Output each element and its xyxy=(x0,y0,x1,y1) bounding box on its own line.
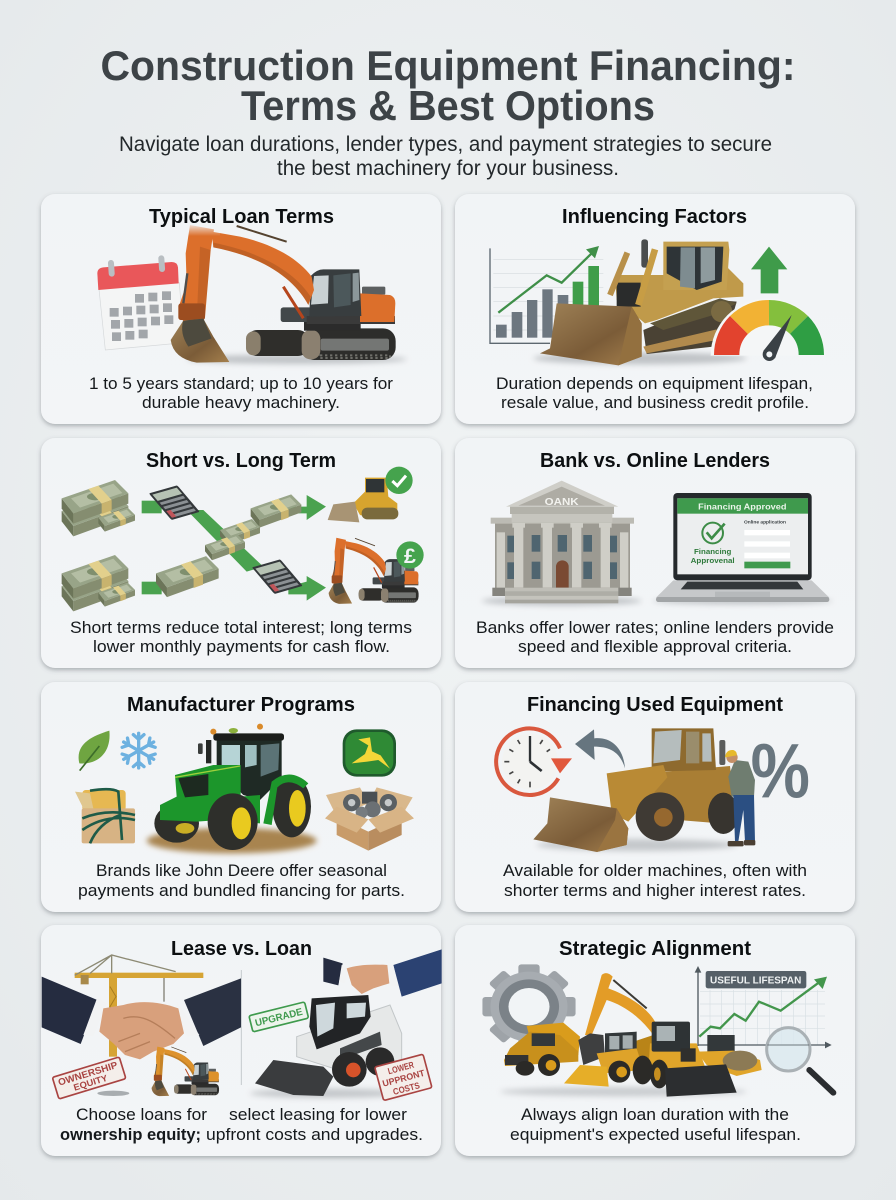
icon: skid steer xyxy=(250,995,403,1098)
text block xyxy=(510,1105,801,1144)
icon: upgrade stamp xyxy=(249,1002,309,1032)
text block: Available for older machines, often with xyxy=(503,861,807,880)
icon: small bulldozer xyxy=(328,478,398,522)
heading: Lease vs. Loan xyxy=(171,938,312,960)
text block xyxy=(89,374,393,412)
heading: Short vs. Long Term xyxy=(146,450,336,472)
icon: ownership equity stamp: OWNERSHIP xyxy=(57,1060,120,1089)
heading: Influencing Factors xyxy=(562,206,747,228)
text block: payments and bundled financing for parts. xyxy=(78,881,405,900)
green flow arrows xyxy=(142,495,326,601)
subtitle xyxy=(119,133,772,180)
icon: center loader xyxy=(564,1032,643,1087)
icon: bundled package xyxy=(75,789,135,843)
line chart: useful lifespan: USEFUL LIFESPAN xyxy=(710,975,801,986)
icon: calculator bottom xyxy=(252,559,303,594)
icon: upgrade stamp: UPGRADE xyxy=(254,1007,304,1029)
subtitle: the best machinery for your business. xyxy=(277,157,619,180)
icon: box of parts xyxy=(325,787,414,851)
icon: leaf xyxy=(79,731,110,771)
text block: resale value, and business credit profile. xyxy=(501,393,809,412)
icon: roller xyxy=(697,1035,762,1076)
icon: lower upfront costs stamp xyxy=(375,1054,432,1101)
panel: bank vs online lenders xyxy=(455,438,855,668)
icon: laptop with approval screen: Financing xyxy=(694,547,731,556)
icon: money stack top xyxy=(62,480,135,536)
text block: Choose loans for xyxy=(76,1105,207,1124)
icon: mini excavator xyxy=(152,1047,219,1096)
icon: deer logo xyxy=(343,729,396,777)
icon: laptop with approval screen: Financing Approved xyxy=(698,502,786,512)
text block: lower monthly payments for cash flow. xyxy=(93,637,390,656)
icon: back arrow xyxy=(575,729,625,768)
icon: worker xyxy=(725,750,755,846)
panel: strategic alignment xyxy=(455,925,855,1156)
icon: small excavator xyxy=(329,538,419,604)
icon: lower upfront costs stamp: COSTS xyxy=(392,1080,421,1097)
text block: Brands like John Deere offer seasonal xyxy=(96,861,387,880)
panel: financing used equipment xyxy=(455,682,855,912)
illustration: money flows to equipment xyxy=(62,467,424,611)
text block: upfront costs and upgrades. xyxy=(206,1125,423,1144)
icon: used wheel loader xyxy=(533,728,739,852)
icon: snowflake xyxy=(121,733,156,768)
illustration: handshakes, crane, skid steer xyxy=(42,949,442,1101)
title: Terms & Best Options xyxy=(241,82,655,129)
icon: laptop with approval screen xyxy=(653,493,833,604)
text block: 1 to 5 years standard; up to 10 years for xyxy=(89,374,393,393)
icon: orange excavator xyxy=(171,225,396,363)
icon: laptop with approval screen: Approvenal xyxy=(691,556,735,565)
panel: manufacturer programs xyxy=(41,682,441,912)
panel: short vs long term xyxy=(41,438,441,668)
text block: equipment's expected useful lifespan. xyxy=(510,1125,801,1144)
text block: ownership equity; xyxy=(60,1125,201,1144)
text block xyxy=(78,861,405,900)
illustration: clock, loader, worker, percent xyxy=(496,728,810,852)
panel: typical loan terms xyxy=(41,194,441,424)
text block xyxy=(60,1105,423,1144)
illustration: chart, bulldozer and gauge xyxy=(490,239,825,365)
icon: clock with return arrow xyxy=(496,728,572,795)
icon: green up arrow xyxy=(751,247,787,293)
text block: speed and flexible approval criteria. xyxy=(518,637,792,656)
icon: bank building xyxy=(482,481,642,606)
title: Construction Equipment Financing: xyxy=(100,42,796,89)
text block xyxy=(496,374,813,412)
icon: machinery fleet xyxy=(500,973,762,1097)
icon: dump truck xyxy=(504,1023,580,1076)
illustration: tractor and seasonal icons xyxy=(75,724,414,853)
heading: Bank vs. Online Lenders xyxy=(540,450,770,472)
icon: ownership equity stamp xyxy=(52,1057,126,1099)
icon: bank building: OANK xyxy=(545,497,580,508)
icon: gear xyxy=(482,964,576,1049)
text block: select leasing for lower xyxy=(229,1105,407,1124)
icon: calculator top xyxy=(149,485,200,520)
icon: percent sign: % xyxy=(751,728,810,814)
text block: Banks offer lower rates; online lenders provide xyxy=(476,618,834,637)
icon: small handshake xyxy=(323,949,442,997)
text block: Short terms reduce total interest; long terms xyxy=(70,618,412,637)
heading: Financing Used Equipment xyxy=(527,694,783,716)
icon: yellow excavator xyxy=(578,973,663,1070)
panel: lease vs loan xyxy=(41,925,442,1156)
icon: gauge xyxy=(711,298,825,361)
panel: influencing factors xyxy=(455,194,855,424)
title xyxy=(100,42,796,129)
icon: money bundles in flow xyxy=(156,494,301,597)
text block xyxy=(70,618,412,656)
text block: Always align loan duration with the xyxy=(521,1105,789,1124)
bar chart xyxy=(490,246,603,343)
illustration: calendar and excavator xyxy=(97,223,407,364)
icon: large handshake xyxy=(42,977,241,1059)
heading: Typical Loan Terms xyxy=(149,206,334,228)
text block xyxy=(503,861,807,900)
icon: laptop with approval screen: Online application xyxy=(744,520,786,525)
icon: ownership equity stamp: EQUITY xyxy=(72,1073,109,1093)
text block xyxy=(476,618,834,656)
icon: currency badge xyxy=(396,541,424,569)
illustration: gear, machinery fleet, lifespan chart xyxy=(482,964,833,1097)
text block: Duration depends on equipment lifespan, xyxy=(496,374,813,393)
icon: bulldozer xyxy=(533,239,747,365)
icon: calendar xyxy=(97,255,184,350)
icon: check badge xyxy=(385,467,413,494)
icon: lower upfront costs stamp: LOWER xyxy=(387,1060,415,1076)
text block: shorter terms and higher interest rates. xyxy=(504,881,806,900)
icon: money stack bottom xyxy=(62,555,135,611)
text block: durable heavy machinery. xyxy=(142,393,340,412)
illustration: bank and laptop xyxy=(482,481,833,606)
icon: magnifier xyxy=(767,1028,833,1093)
line chart: useful lifespan xyxy=(695,966,832,1048)
icon: tower crane xyxy=(75,955,203,1096)
icon: lower upfront costs stamp: UPPRONT xyxy=(381,1068,426,1089)
icon: front loader xyxy=(633,1022,737,1097)
heading: Strategic Alignment xyxy=(559,938,751,960)
heading: Manufacturer Programs xyxy=(127,694,355,716)
icon: green tractor xyxy=(147,724,317,853)
subtitle: Navigate loan durations, lender types, and payment strategies to secure xyxy=(119,133,772,156)
icon: currency badge: £ xyxy=(404,544,416,568)
